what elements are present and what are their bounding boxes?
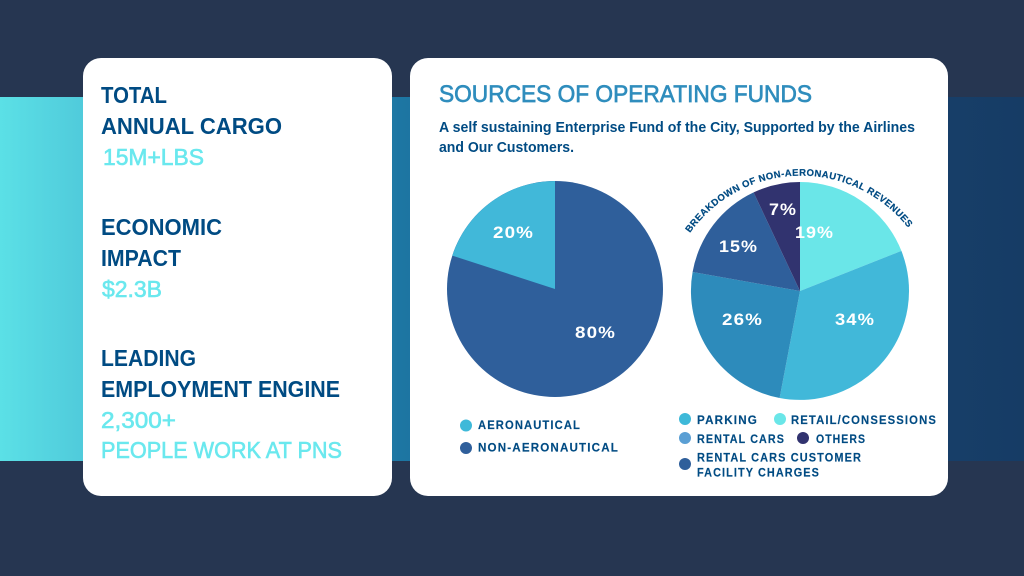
legend: left pie <box>460 418 619 454</box>
legend: right pie: PARKING <box>697 413 758 427</box>
pie chart: aeronautical vs non-aeronautical <box>447 181 663 397</box>
legend: right pie: FACILITY CHARGES <box>697 466 820 480</box>
stat: economic impact: $2.3B <box>102 276 162 302</box>
legend: left pie: NON-AERONAUTICAL <box>478 440 619 454</box>
stat: economic impact: IMPACT <box>101 245 181 271</box>
pie chart: breakdown of non-aeronautical revenues: 15% <box>719 237 758 256</box>
subtitle <box>439 120 915 156</box>
legend: right pie: OTHERS <box>816 432 866 446</box>
stat: total annual cargo <box>101 82 282 170</box>
stat: leading employment engine: LEADING <box>101 345 196 371</box>
stat: leading employment engine: EMPLOYMENT ENGINE <box>101 376 340 402</box>
curved chart label: BREAKDOWN OF NON-AERONAUTICAL REVENUES <box>684 169 912 233</box>
gradient band <box>0 97 1024 461</box>
stat: economic impact: ECONOMIC <box>101 214 222 240</box>
legend: right pie: RENTAL CARS <box>697 432 785 446</box>
pie chart: aeronautical vs non-aeronautical: 80% <box>575 323 616 342</box>
subtitle: and Our Customers. <box>439 140 574 156</box>
pie chart: aeronautical vs non-aeronautical: 20% <box>493 223 534 242</box>
pie chart: breakdown of non-aeronautical revenues: 7% <box>769 200 797 219</box>
panel: sources of operating funds <box>410 58 948 496</box>
stat: economic impact <box>101 214 222 302</box>
legend: left pie: AERONAUTICAL <box>478 418 581 432</box>
stat: leading employment engine: PEOPLE WORK AT PNS <box>101 437 342 463</box>
legend: right pie: RENTAL CARS CUSTOMER <box>697 450 862 464</box>
heading: SOURCES OF OPERATING FUNDS <box>439 81 812 108</box>
legend: right pie <box>679 413 937 480</box>
subtitle: A self sustaining Enterprise Fund of the City, Supported by the Airlines <box>439 120 915 136</box>
pie chart: breakdown of non-aeronautical revenues: 26% <box>722 310 763 329</box>
pie chart: breakdown of non-aeronautical revenues <box>691 182 909 400</box>
pie chart: breakdown of non-aeronautical revenues: 19% <box>795 223 834 242</box>
stat: leading employment engine <box>101 345 342 463</box>
stat: total annual cargo: TOTAL <box>101 82 167 108</box>
legend: right pie: RETAIL/CONSESSIONS <box>791 413 937 427</box>
stat: leading employment engine: 2,300+ <box>101 407 176 433</box>
pie chart: breakdown of non-aeronautical revenues: 34% <box>835 310 875 329</box>
stat: total annual cargo: 15M+LBS <box>103 144 204 170</box>
panel: key statistics <box>83 58 392 496</box>
stat: total annual cargo: ANNUAL CARGO <box>101 113 282 139</box>
